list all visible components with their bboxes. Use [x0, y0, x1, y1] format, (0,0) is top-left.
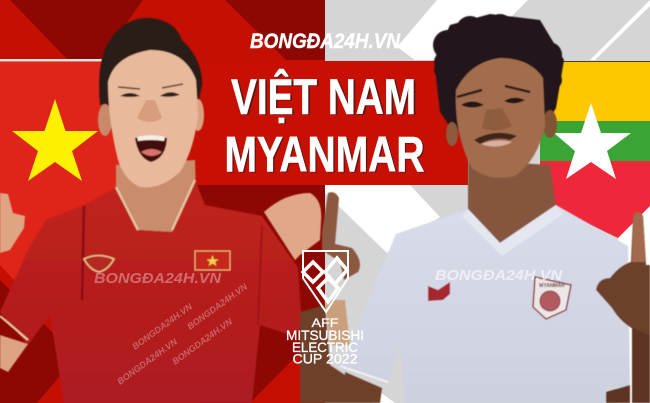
icon: white star	[554, 103, 631, 179]
panel: Vietnam flag	[0, 59, 165, 300]
text: tournament name: MITSUBISHI	[286, 327, 364, 343]
panel: centre title banner	[100, 61, 468, 185]
neck	[116, 160, 196, 232]
watermarks: BONGDA24H.VN	[115, 336, 179, 387]
nose	[482, 108, 512, 131]
text: tournament name	[286, 316, 364, 366]
icon: AFF cup logo	[303, 251, 348, 312]
face	[108, 50, 198, 187]
icon: yellow star	[12, 99, 98, 181]
watermarks: BONGDA24H.VN	[130, 301, 194, 352]
crest label: MYANMAR	[539, 283, 565, 289]
icon: jersey flag badge	[195, 251, 230, 270]
ears	[98, 104, 112, 136]
player: Vietnam	[0, 18, 321, 403]
text: tournament name: ELECTRIC	[292, 339, 358, 355]
title: Myanmar: MYANMAR	[226, 128, 426, 184]
face	[456, 58, 545, 178]
panel: Vietnam red background	[0, 0, 325, 403]
watermarks: BONGDA24H.VN	[185, 281, 249, 332]
watermarks: BONGĐA24H.VN	[94, 270, 222, 287]
title: Việt Nam: VIỆT NAM	[233, 70, 418, 126]
left hand with pointing finger	[322, 192, 360, 280]
panel: Myanmar grey background	[325, 0, 650, 403]
jersey	[0, 180, 302, 403]
icon: Myanmar crest	[533, 277, 571, 319]
title: Myanmar: MYANMAR	[224, 126, 424, 182]
left arm	[0, 335, 28, 372]
neck	[468, 160, 556, 244]
title: Việt Nam: VIỆT NAM	[231, 69, 416, 125]
icon: jersey brand crest	[84, 256, 114, 272]
mouth	[135, 135, 167, 162]
eyes	[461, 98, 525, 108]
jersey	[340, 205, 630, 403]
player: Myanmar	[300, 14, 650, 403]
ears	[543, 110, 557, 138]
right forearm and fist	[264, 193, 321, 260]
nose	[137, 100, 162, 122]
hair	[99, 18, 202, 105]
right hand with pointing finger	[596, 212, 650, 335]
sponsor logo: BONGĐA24H.VN	[250, 30, 401, 53]
text: tournament name: AFF	[312, 316, 338, 330]
watermarks: BONGDA24H.VN	[170, 316, 234, 367]
icon: jersey brand logo	[428, 282, 450, 301]
left fist	[0, 193, 25, 253]
hair	[433, 14, 564, 130]
watermarks: BONGĐA24H.VN	[435, 267, 563, 284]
eyes	[120, 92, 180, 97]
panel: Myanmar flag	[540, 61, 650, 238]
text: tournament name: CUP 2022	[292, 350, 358, 366]
mouth and moustache	[474, 133, 517, 144]
watermarks	[94, 267, 563, 387]
